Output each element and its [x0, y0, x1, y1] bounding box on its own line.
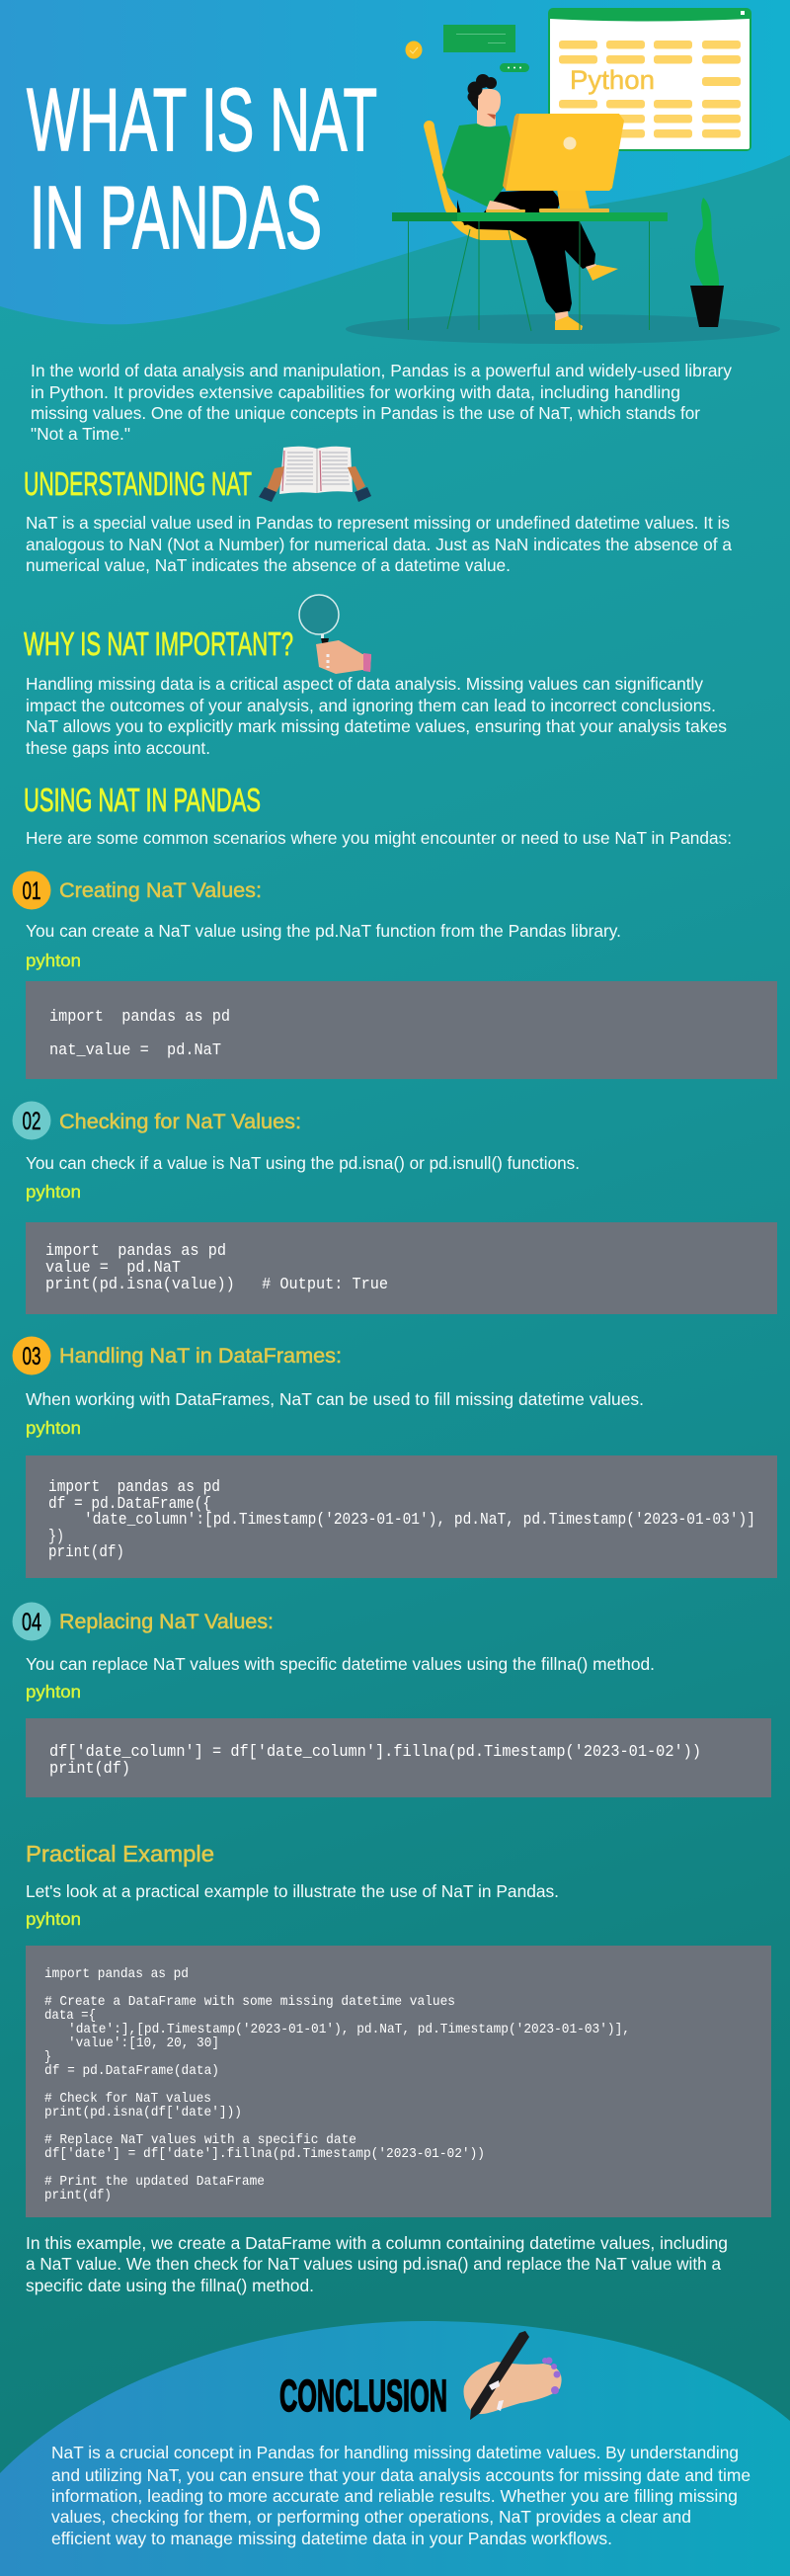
desk [392, 212, 668, 331]
practical example section [26, 1841, 771, 2295]
step 02 text: You can check if a value is NaT using the pd.isna() or pd.isnull() functions. [26, 1153, 580, 1173]
step 02 code block: value = pd.NaT [45, 1258, 181, 1277]
step 02 code block [26, 1222, 777, 1314]
floor shadow [346, 314, 780, 344]
intro paragraph: missing values. One of the unique concepts in Pandas is the use of NaT, which stands for [31, 403, 700, 423]
step 03 text: When working with DataFrames, NaT can be used to fill missing datetime values. [26, 1389, 644, 1409]
chair [424, 121, 528, 240]
conclusion text: and utilizing NaT, you can ensure that your data analysis accounts for missing date and time [51, 2465, 750, 2485]
conclusion text [51, 2443, 750, 2548]
number badge 02: 02 [22, 1108, 41, 1135]
step 01 code block: nat_value = pd.NaT [49, 1040, 221, 1059]
step 03 code block: df = pd.DataFrame({ [48, 1494, 211, 1513]
number badge 03: 03 [22, 1343, 41, 1371]
intro paragraph: "Not a Time." [31, 424, 130, 444]
practical example code block: # Create a DataFrame with some missing datetime values [44, 1994, 455, 2010]
step 02 code block: print(pd.isna(value)) # Output: True [45, 1275, 388, 1293]
conclusion background shape [0, 2321, 790, 2576]
step 02 language label: pyhton [26, 1182, 81, 1202]
number badge 04 [12, 1603, 51, 1640]
why important text [26, 674, 727, 758]
conclusion text: information, leading to more accurate and reliable results. Whether you are filling missing [51, 2486, 738, 2506]
practical example code block: 'value':[10, 20, 30] [68, 2036, 219, 2051]
step 03 code block: }) [48, 1527, 64, 1545]
using NaT intro text: Here are some common scenarios where you might encounter or need to use NaT in Pandas: [26, 828, 732, 848]
conclusion heading: CONCLUSION [279, 2370, 447, 2421]
step 03 heading: Handling NaT in DataFrames: [59, 1344, 342, 1368]
practical example code block: df = pd.DataFrame(data) [44, 2063, 219, 2079]
heading: why is NaT important: WHY IS NAT IMPORTANT? [24, 625, 293, 662]
speech bubble [500, 63, 529, 72]
illustration: person at computer with Python window [346, 8, 780, 344]
step 04 code block: df['date_column'] = df['date_column'].fillna(pd.Timestamp('2023-01-02')) [49, 1742, 701, 1761]
practical example code block: import pandas as pd [44, 1966, 189, 1982]
python spreadsheet window: Python [570, 65, 655, 95]
step 01 text: You can create a NaT value using the pd.NaT function from the Pandas library. [26, 921, 621, 941]
header wave background [0, 0, 790, 324]
conclusion text: efficient way to manage missing datetime data in your Pandas workflows. [51, 2529, 612, 2548]
step 01 language label: pyhton [26, 951, 81, 970]
step 04 language label: pyhton [26, 1682, 81, 1702]
why important text: impact the outcomes of your analysis, and ignoring them can lead to incorrect conclusions. [26, 696, 716, 715]
why important text: Handling missing data is a critical aspect of data analysis. Missing values can significantly [26, 674, 703, 694]
heading: using NaT in pandas: USING NAT IN PANDAS [24, 782, 261, 818]
plant [690, 198, 724, 327]
step 03 code block: print(df) [48, 1542, 124, 1561]
title: IN PANDAS [30, 169, 322, 268]
practical example explanation: specific date using the fillna() method. [26, 2276, 314, 2295]
practical example code block [26, 1946, 771, 2217]
conclusion panel [0, 2321, 790, 2576]
practical example code block: print(df) [44, 2188, 112, 2203]
understanding NaT text: analogous to NaN (Not a Number) for numerical data. Just as NaN indicates the absence of a [26, 535, 732, 554]
title [27, 71, 377, 268]
number badge 02 [12, 1101, 51, 1140]
icon: hands holding open book [259, 447, 371, 502]
step 04 code block [26, 1718, 771, 1797]
step 02 heading: Checking for NaT Values: [59, 1110, 301, 1133]
practical example heading: Practical Example [26, 1841, 214, 1867]
icon: hand holding magnifier [299, 595, 371, 674]
why important text: NaT allows you to explicitly mark missing datetime values, ensuring that your analysis takes [26, 716, 727, 736]
green card [443, 25, 515, 52]
number badge 01 [12, 872, 51, 909]
practical example code block: } [44, 2049, 51, 2065]
practical example code block: # Replace NaT values with a specific date [44, 2132, 356, 2148]
understanding NaT text [26, 513, 732, 575]
monitor [503, 114, 624, 209]
step 03 code block: import pandas as pd [48, 1477, 220, 1496]
intro paragraph: In the world of data analysis and manipulation, Pandas is a powerful and widely-used library [31, 361, 732, 380]
check badge [405, 42, 423, 59]
step 01 heading: Creating NaT Values: [59, 878, 262, 902]
practical example explanation: a NaT value. We then check for NaT values using pd.isna() and replace the NaT value with a [26, 2254, 721, 2274]
practical example explanation [26, 2233, 728, 2295]
step 03 code block [26, 1455, 777, 1578]
heading: understanding NaT: UNDERSTANDING NAT [24, 465, 252, 502]
icon: hand writing with pen [463, 2331, 562, 2420]
practical example code block: # Print the updated DataFrame [44, 2174, 265, 2190]
title: WHAT IS NAT [27, 71, 377, 170]
practical example code block: data ={ [44, 2008, 96, 2024]
step 04 code block: print(df) [49, 1759, 130, 1778]
number badge 01: 01 [22, 877, 41, 905]
number badge 04: 04 [22, 1609, 41, 1636]
practical example intro: Let's look at a practical example to illustrate the use of NaT in Pandas. [26, 1881, 559, 1901]
step 01 code block: import pandas as pd [49, 1007, 230, 1026]
keyboard [486, 208, 609, 212]
number badge 03 [12, 1336, 51, 1375]
practical example code block: print(pd.isna(df['date'])) [44, 2105, 242, 2120]
understanding NaT text: NaT is a special value used in Pandas to represent missing or undefined datetime values. It is [26, 513, 730, 533]
step 04 text: You can replace NaT values with specific datetime values using the fillna() method. [26, 1654, 655, 1674]
python spreadsheet window [548, 8, 751, 151]
practical example code block: 'date':],[pd.Timestamp('2023-01-01'), pd.NaT, pd.Timestamp('2023-01-03')], [68, 2022, 630, 2037]
step 03 language label: pyhton [26, 1418, 81, 1438]
person [442, 74, 618, 330]
step 04 heading: Replacing NaT Values: [59, 1610, 274, 1633]
step 04 [12, 1603, 771, 1797]
practical example code block: df['date'] = df['date'].fillna(pd.Timestamp('2023-01-02')) [44, 2146, 485, 2162]
practical example language label: pyhton [26, 1909, 81, 1929]
step 03 [12, 1336, 777, 1578]
conclusion text: NaT is a crucial concept in Pandas for handling missing datetime values. By understanding [51, 2443, 739, 2462]
intro paragraph [31, 361, 732, 444]
practical example code block: # Check for NaT values [44, 2091, 211, 2107]
conclusion text: values, checking for them, or performing other operations, NaT provides a clear and [51, 2507, 691, 2527]
intro paragraph: in Python. It provides extensive capabilities for working with data, including handling [31, 382, 680, 402]
step 02 [12, 1101, 777, 1314]
step 02 code block: import pandas as pd [45, 1241, 226, 1260]
understanding NaT text: numerical value, NaT indicates the absence of a datetime value. [26, 555, 511, 575]
step 01 code block [26, 981, 777, 1079]
why important text: these gaps into account. [26, 738, 210, 758]
step 01 [12, 872, 777, 1079]
practical example explanation: In this example, we create a DataFrame with a column containing datetime values, including [26, 2233, 728, 2253]
